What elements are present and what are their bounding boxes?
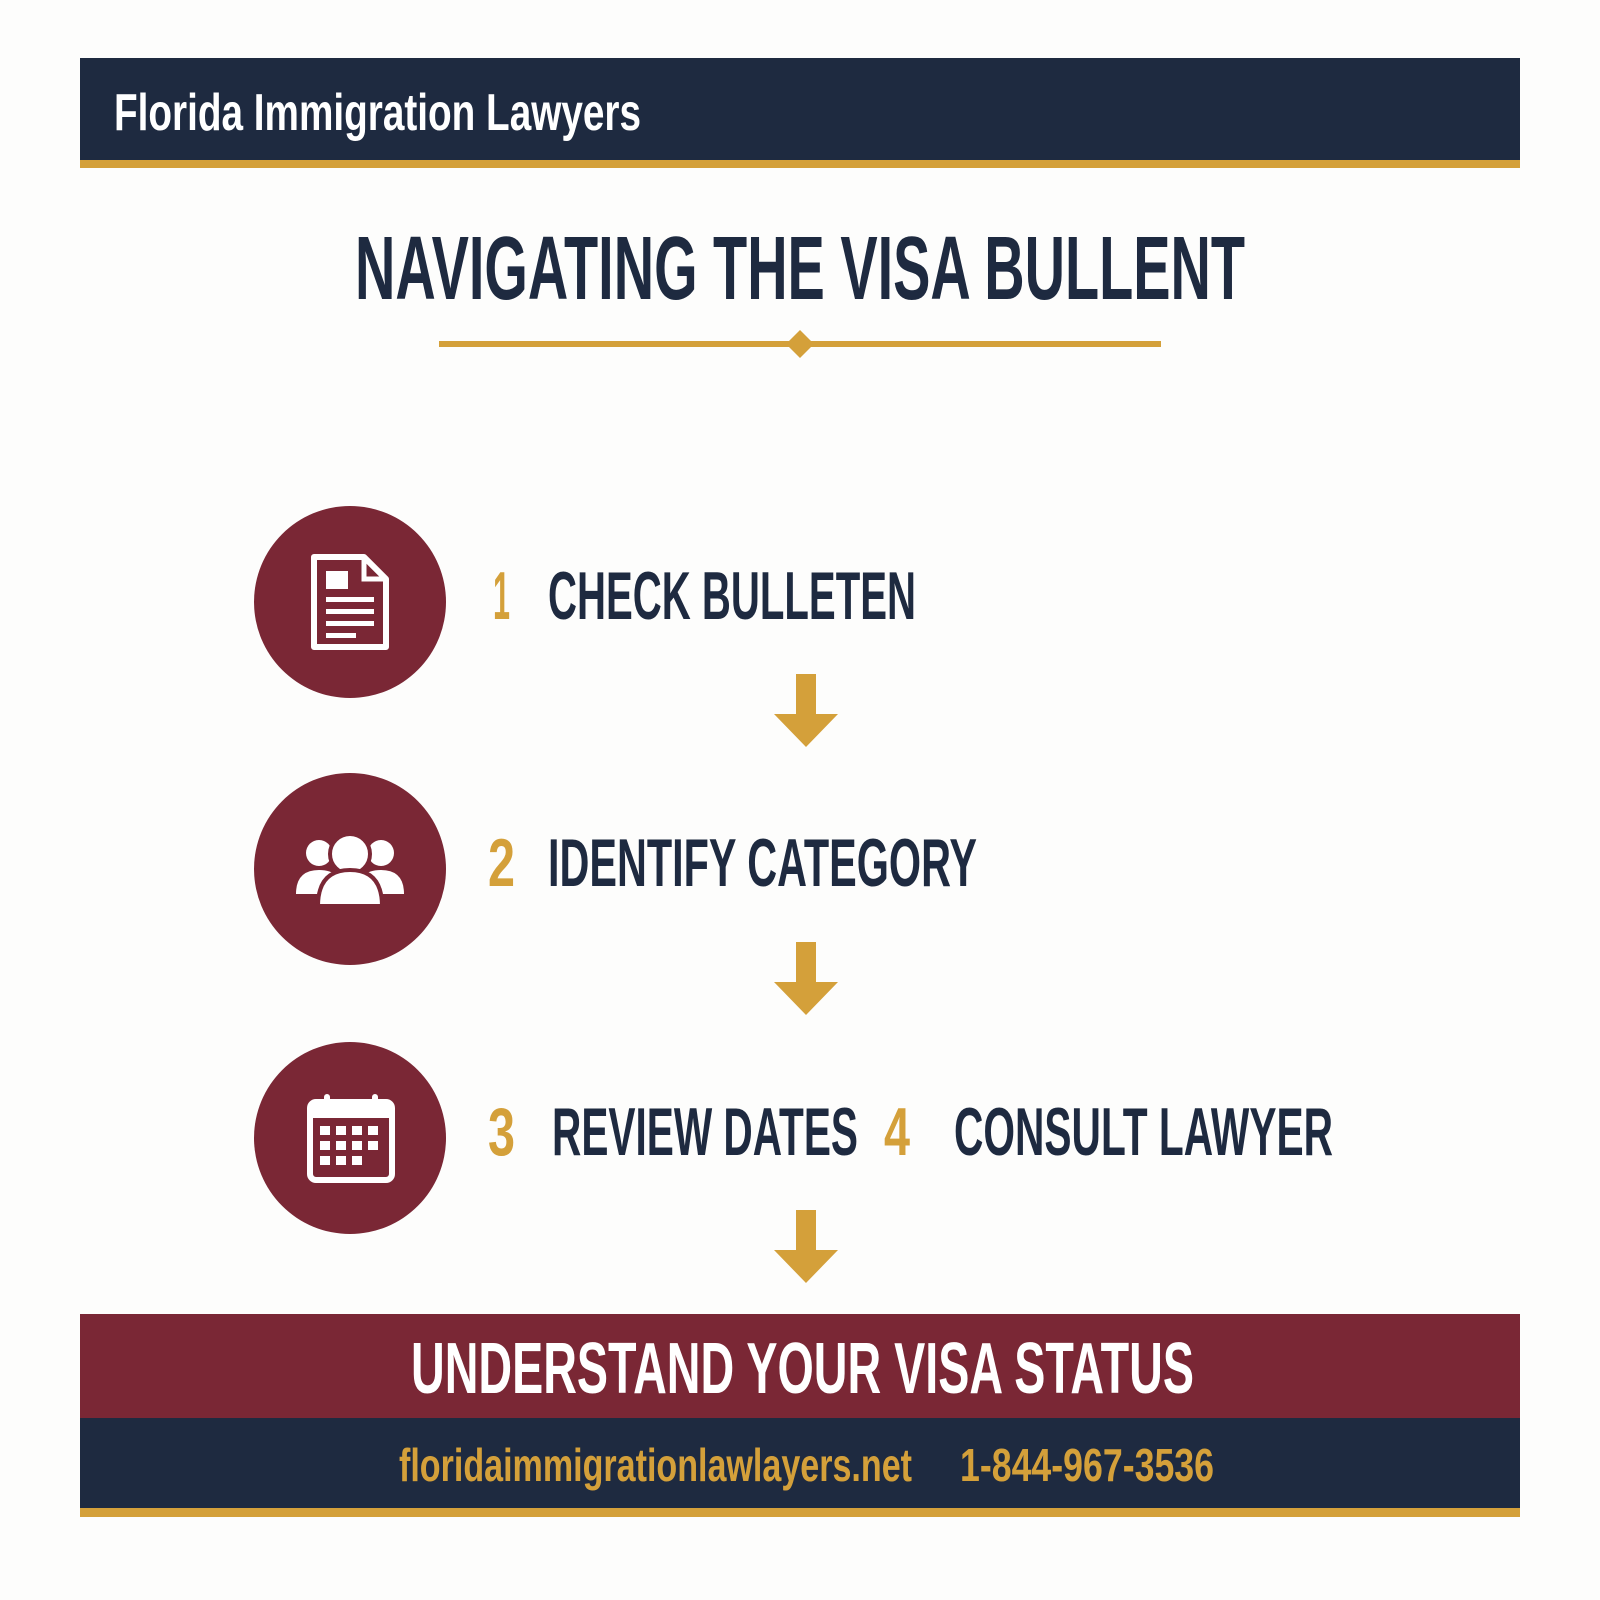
icon: document [254, 506, 446, 698]
step 3 and 4: REVIEW DATES [552, 1094, 858, 1170]
arrow 2 [774, 942, 838, 1015]
arrow 1 [774, 674, 838, 747]
icon: calendar [254, 1042, 446, 1234]
banner: understand your visa status: UNDERSTAND YOUR VISA STATUS [411, 1329, 1194, 1409]
arrow 3 [774, 1210, 838, 1283]
step 3 and 4: 3 [488, 1094, 515, 1170]
step 2: IDENTIFY CATEGORY [548, 825, 977, 901]
icon: people [254, 773, 446, 965]
footer contact bar: 1-844-967-3536 [960, 1439, 1214, 1491]
step 1: CHECK BULLETEN [548, 558, 916, 634]
footer contact bar: floridaimmigrationlawlayers.net [399, 1439, 912, 1491]
header text: Florida Immigration Lawyers [114, 84, 641, 142]
step 2 [254, 773, 977, 965]
footer contact bar [80, 1418, 1520, 1517]
title underline with diamond [439, 330, 1161, 358]
step 3 and 4 [254, 1042, 1333, 1234]
step 2: 2 [488, 825, 515, 901]
banner: understand your visa status [80, 1314, 1520, 1418]
step 1: 1 [493, 558, 510, 634]
step 3 and 4: CONSULT LAWYER [954, 1094, 1333, 1170]
step 1 [254, 506, 916, 698]
header bar [80, 58, 1520, 168]
step 3 and 4: 4 [884, 1094, 910, 1170]
